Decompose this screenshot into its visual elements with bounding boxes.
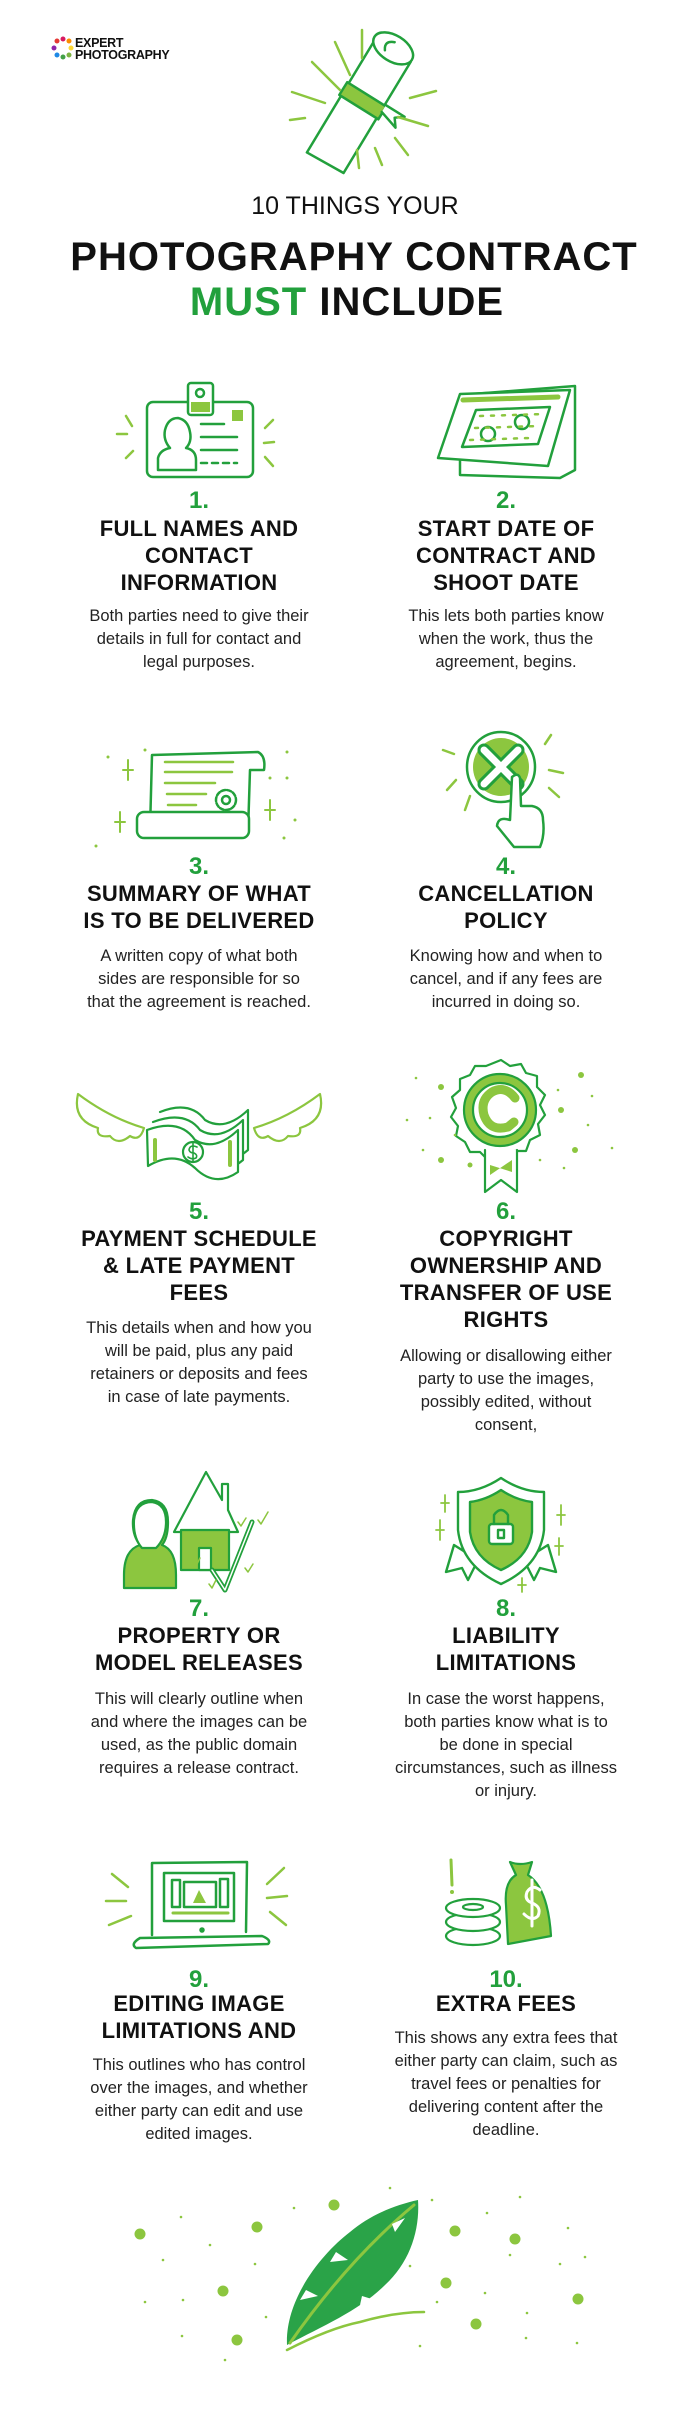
item 7: This will clearly outline when <box>95 1690 303 1708</box>
item 10: This shows any extra fees that <box>395 2029 617 2047</box>
item 3: A written copy of what both <box>100 947 298 965</box>
item 5: retainers or deposits and fees <box>90 1365 308 1383</box>
item 6: party to use the images, <box>418 1370 594 1388</box>
item 6: consent, <box>475 1416 537 1434</box>
item 3 <box>83 853 315 1011</box>
item 2: 2. <box>496 487 516 514</box>
item 6: 6. <box>496 1198 516 1225</box>
icon: document <box>94 748 296 848</box>
item 9: edited images. <box>145 2125 253 2143</box>
item 1: legal purposes. <box>143 653 255 671</box>
item 7: and where the images can be <box>91 1713 307 1731</box>
item 9: This outlines who has control <box>93 2056 305 2074</box>
icon: shield <box>436 1478 565 1592</box>
item 7: used, as the public domain <box>101 1736 297 1754</box>
item 8: 8. <box>496 1595 516 1622</box>
icon: cancel button <box>443 732 563 847</box>
item 7: PROPERTY OR <box>117 1623 281 1648</box>
item 10: deadline. <box>472 2121 539 2139</box>
item 8: both parties know what is to <box>404 1713 608 1731</box>
item 1: 1. <box>189 487 209 514</box>
item 3: 3. <box>189 853 209 880</box>
item 10: EXTRA FEES <box>436 1991 576 2016</box>
item 3: that the agreement is reached. <box>87 993 311 1011</box>
item 8: be done in special <box>439 1736 572 1754</box>
item 3: IS TO BE DELIVERED <box>83 908 315 933</box>
item 8: LIABILITY <box>452 1623 560 1648</box>
item 7: 7. <box>189 1595 209 1622</box>
icon: copyright badge <box>406 1060 613 1192</box>
item 6: COPYRIGHT <box>439 1226 573 1251</box>
item 4: Knowing how and when to <box>410 947 602 965</box>
item 2: CONTRACT AND <box>416 543 596 568</box>
item 6: TRANSFER OF USE <box>400 1280 612 1305</box>
item 9: LIMITATIONS AND <box>102 2018 296 2043</box>
item 5: & LATE PAYMENT <box>103 1253 295 1278</box>
item 5: PAYMENT SCHEDULE <box>81 1226 317 1251</box>
item 4: CANCELLATION <box>418 881 594 906</box>
item 2: SHOOT DATE <box>433 570 579 595</box>
item 1 <box>89 487 309 671</box>
item 1: CONTACT <box>145 543 253 568</box>
item 6: possibly edited, without <box>421 1393 591 1411</box>
title: 10 THINGS YOUR <box>251 192 459 220</box>
item 1: INFORMATION <box>121 570 277 595</box>
item 2 <box>408 487 604 671</box>
item 8 <box>395 1595 617 1800</box>
item 10: 10. <box>489 1966 523 1993</box>
item 6 <box>400 1198 612 1434</box>
item 3: SUMMARY OF WHAT <box>87 881 311 906</box>
item 5: in case of late payments. <box>108 1388 290 1406</box>
item 2: agreement, begins. <box>435 653 577 671</box>
item 6: Allowing or disallowing either <box>400 1347 612 1365</box>
decoration dots <box>134 2187 586 2361</box>
item 5 <box>81 1198 317 1406</box>
logo text <box>75 36 170 62</box>
item 7 <box>91 1595 307 1777</box>
icon: calendar <box>438 386 575 478</box>
item 3: sides are responsible for so <box>98 970 300 988</box>
item 1: Both parties need to give their <box>89 607 309 625</box>
title <box>70 192 638 324</box>
logo text: EXPERT <box>75 36 123 50</box>
item 10 <box>395 1966 618 2139</box>
item 8: In case the worst happens, <box>407 1690 605 1708</box>
logo text: PHOTOGRAPHY <box>75 48 169 62</box>
item 4 <box>410 853 602 1011</box>
item 4: incurred in doing so. <box>432 993 580 1011</box>
icon: laptop <box>106 1862 287 1948</box>
icon: feather <box>287 2200 424 2350</box>
icon: coins and money bag <box>446 1860 551 1945</box>
item 6: RIGHTS <box>464 1307 548 1332</box>
item 10: either party can claim, such as <box>395 2052 617 2070</box>
item 4: cancel, and if any fees are <box>410 970 602 988</box>
item 5: This details when and how you <box>86 1319 312 1337</box>
item 4: 4. <box>496 853 516 880</box>
item 5: FEES <box>170 1280 228 1305</box>
item 4: POLICY <box>464 908 548 933</box>
item 7: requires a release contract. <box>99 1759 299 1777</box>
icon: ID card <box>117 383 274 477</box>
item 9: EDITING IMAGE <box>113 1991 285 2016</box>
icon: money with wings <box>77 1094 321 1179</box>
item 9 <box>90 1966 308 2143</box>
item 2: when the work, thus the <box>419 630 593 648</box>
text: PHOTOGRAPHY CONTRACT <box>70 235 638 279</box>
item 2: This lets both parties know <box>408 607 604 625</box>
item 5: 5. <box>189 1198 209 1225</box>
icon: logo mark <box>52 36 74 60</box>
item 10: travel fees or penalties for <box>411 2075 601 2093</box>
item 9: either party can edit and use <box>95 2102 303 2120</box>
item 8: or injury. <box>475 1782 537 1800</box>
item 8: circumstances, such as illness <box>395 1759 617 1777</box>
item 9: 9. <box>189 1966 209 1993</box>
text: MUST INCLUDE <box>190 280 504 324</box>
item 8: LIMITATIONS <box>436 1650 576 1675</box>
icon: person and house <box>124 1472 268 1590</box>
item 1: FULL NAMES AND <box>100 516 298 541</box>
item 9: over the images, and whether <box>90 2079 308 2097</box>
item 5: will be paid, plus any paid <box>105 1342 293 1360</box>
item 10: delivering content after the <box>409 2098 603 2116</box>
item 1: details in full for contact and <box>97 630 301 648</box>
icon: diploma scroll <box>290 26 439 186</box>
item 7: MODEL RELEASES <box>95 1650 303 1675</box>
item 2: START DATE OF <box>418 516 594 541</box>
item 6: OWNERSHIP AND <box>410 1253 602 1278</box>
